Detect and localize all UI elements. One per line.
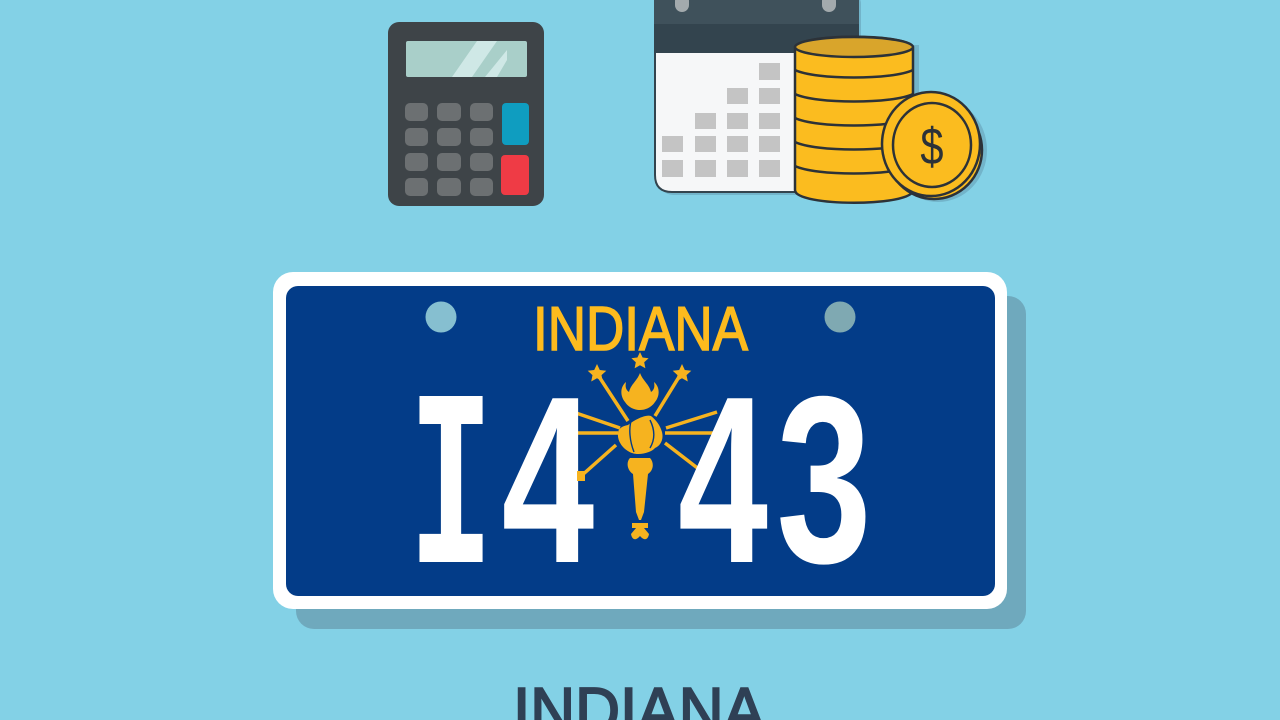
plate state name: INDIANA: [533, 295, 749, 364]
plate number 3: 3: [776, 346, 872, 612]
icon: calculator: [388, 22, 544, 206]
plate number I: I: [409, 353, 493, 639]
icon: dollar coin: [882, 92, 987, 202]
icon: calendar: [654, 0, 861, 195]
mounting hole right: [824, 302, 856, 332]
icon: Indiana torch with stars: [588, 352, 691, 539]
plate blue panel: [286, 286, 995, 596]
icon: stack of gold coins: [795, 37, 919, 203]
license plate: [273, 272, 1026, 639]
plate shadow: [296, 296, 1026, 629]
icon: dollar coin: $: [920, 117, 944, 175]
ray ends: [577, 471, 585, 481]
torch rays and stars: [571, 372, 717, 477]
plate white border: [273, 272, 1007, 609]
plate number 4: 4: [502, 347, 594, 613]
mounting hole left: [426, 302, 456, 332]
plate number 4 second: 4: [678, 348, 768, 613]
